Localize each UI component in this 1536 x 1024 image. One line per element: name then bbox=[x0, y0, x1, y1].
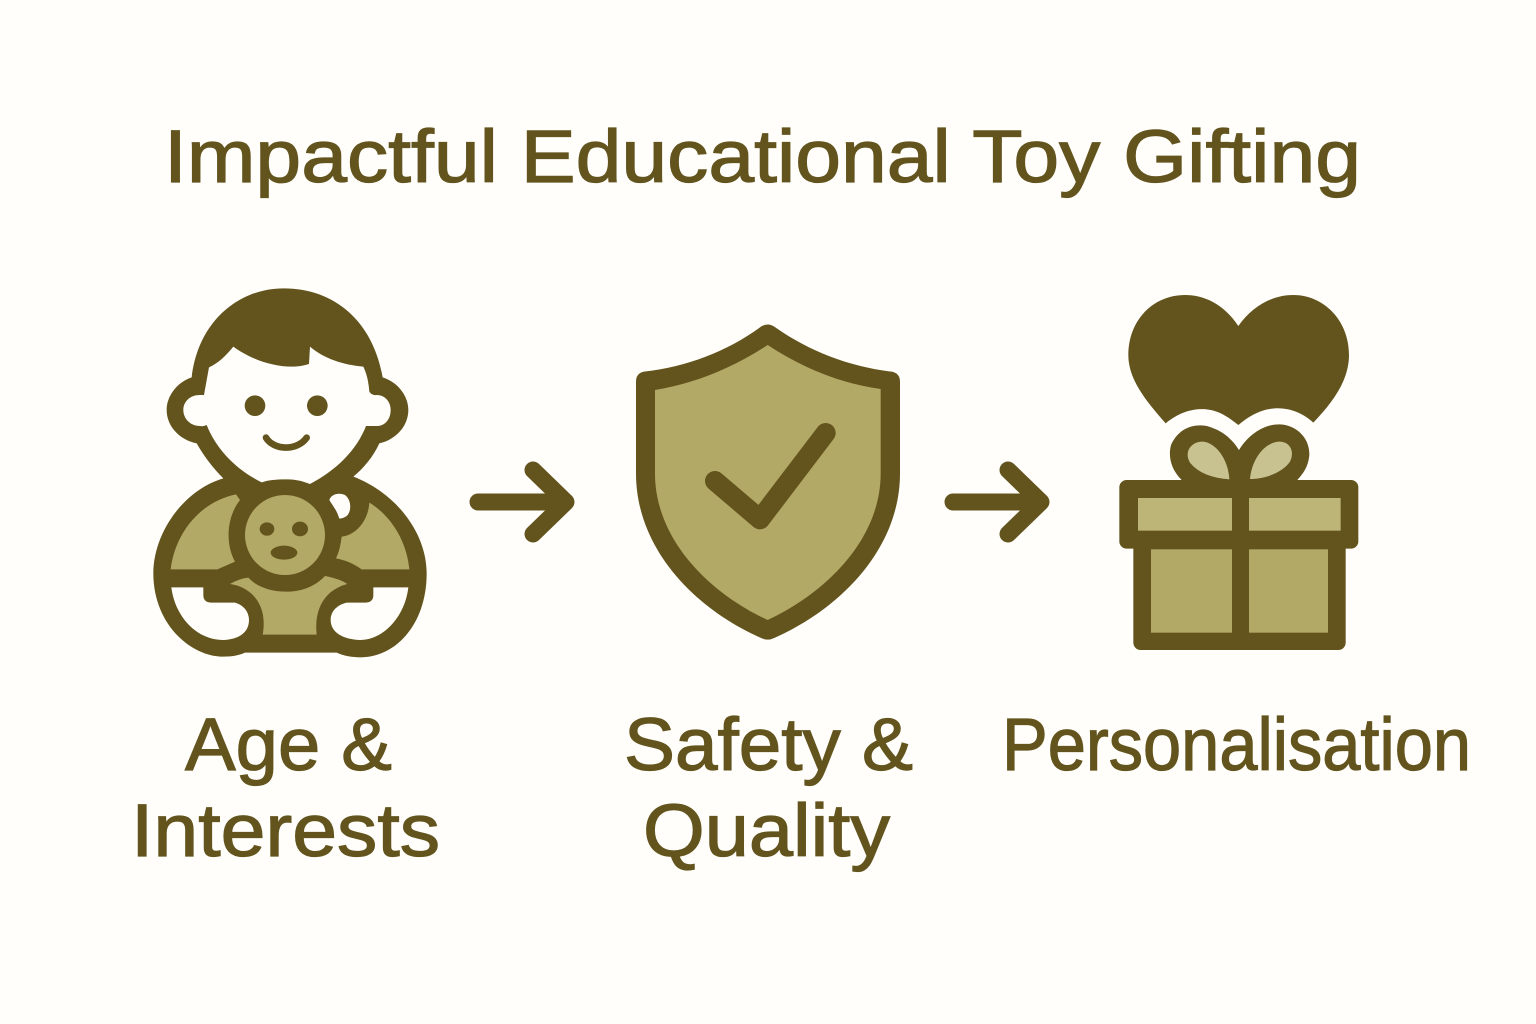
label: Age & Interests: Interests bbox=[131, 789, 440, 872]
label: Age & Interests: Age & bbox=[185, 703, 392, 786]
icon: child holding teddy toy bbox=[153, 288, 427, 657]
label: Safety & Quality: Quality bbox=[643, 789, 890, 872]
arrow: second bbox=[953, 470, 1041, 534]
icon: shield with check bbox=[636, 324, 900, 640]
label: Personalisation: Personalisation bbox=[1002, 703, 1471, 786]
title: Impactful Educational Toy Gifting bbox=[164, 115, 1361, 198]
label: Safety & Quality bbox=[624, 703, 913, 872]
label: Age & Interests bbox=[131, 703, 440, 872]
arrow: first bbox=[478, 470, 566, 534]
label: Safety & Quality: Safety & bbox=[624, 703, 913, 786]
icon: gift with heart bbox=[1119, 295, 1358, 650]
